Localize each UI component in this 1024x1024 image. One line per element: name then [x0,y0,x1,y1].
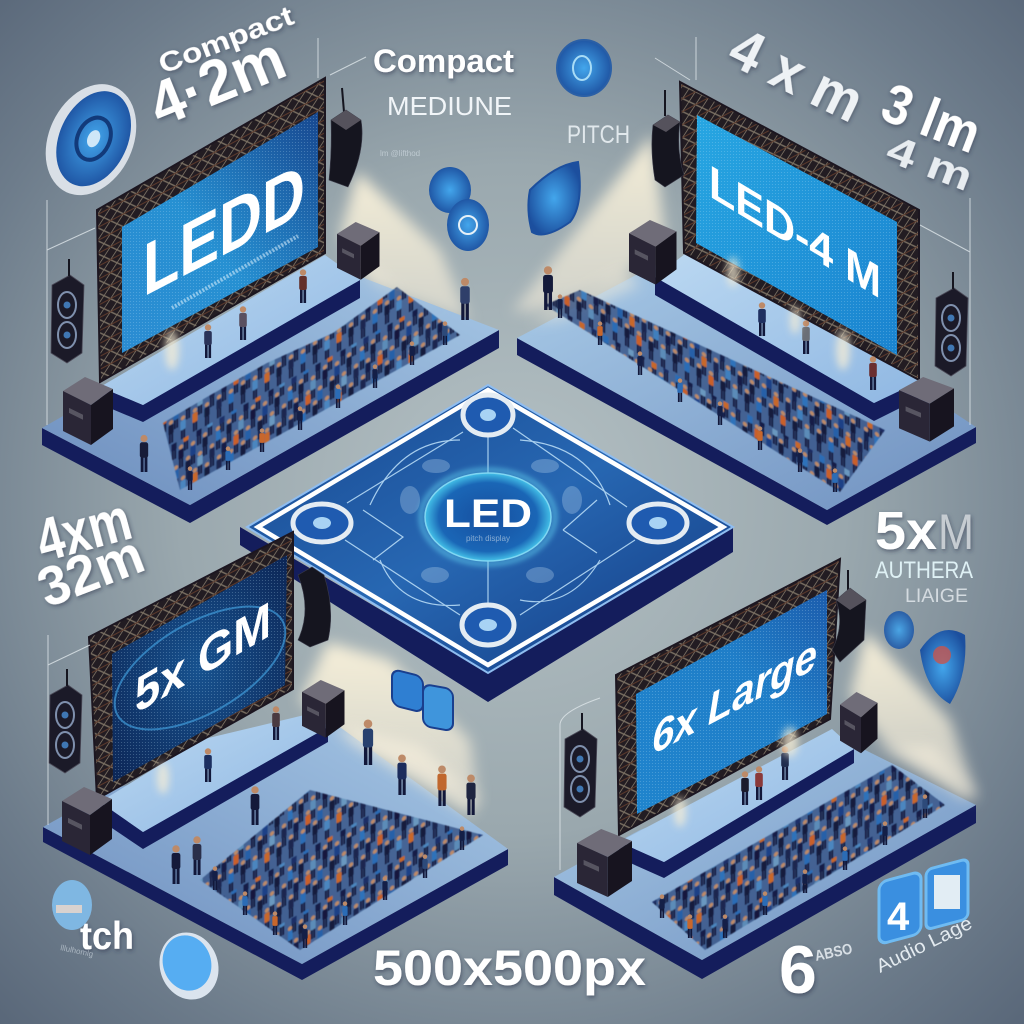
small caption: medium: lm @lifthod [380,149,420,158]
stage top right [655,247,922,421]
stage bottom left [100,712,328,849]
tower speaker bottom left [49,669,82,773]
label: 500x500px: 500x500px [373,940,646,996]
small caption: tch: lllulhomlg [60,943,94,959]
stage presenters bottom left [204,706,280,782]
spotlight top left [165,330,179,370]
spotlight bottom left [157,762,169,794]
crowd bottom left [200,790,483,950]
hanging speaker bottom left [298,567,331,647]
white border [258,390,723,665]
label: Authera: AUTHERA [875,557,973,584]
central LED badge: pitch display [466,534,510,543]
LED screen bottom left: 5x GM [135,591,271,725]
icon: thumbprint top [557,40,611,96]
label: 3 lm: 3 lm [874,70,990,165]
panel: large screen bottom right [554,559,976,979]
equipment bottom right [577,692,878,897]
beam overlay bottom right [880,745,975,800]
label: Compact flat: Compact [373,43,514,79]
label: 4 x m: 4 x m [719,15,874,135]
crowd top right [545,290,885,492]
icon: shield top right [528,162,580,234]
label: PITCH: PITCH [567,121,630,149]
stage top left [100,255,360,422]
dimension lines bottom left [48,635,90,825]
label: 5xM: M [938,504,974,560]
panel: screen bottom left [43,532,508,980]
LED screen top left: LEDD [143,146,305,313]
crowd top left [163,287,460,490]
panel: compact screen top left [42,38,499,523]
icons: medium badges [429,167,489,251]
diagram top surface [247,385,733,673]
tower speaker bottom right [564,713,597,817]
platform bottom left [43,725,508,980]
icon: mascot face bottom left [52,880,92,930]
platform top left [42,265,499,523]
standing person front left [140,435,148,472]
tower speaker top left [51,259,84,363]
icons: bottom right upper [884,611,965,704]
label: 4xm: 4xm [29,485,138,575]
beam overlay top right [530,270,640,322]
node bottom [462,605,514,645]
node right [629,504,687,542]
icons: bottom right lower: 4 [887,895,910,939]
LED screen top right: LED-4 M [709,155,881,309]
equipment top left [63,222,380,445]
spotlights bottom right [674,727,798,827]
small caption: next to 6: ABSO [813,940,854,965]
stage presenters top left [204,269,307,358]
label: Medium: MEDIUNE [387,91,512,121]
label: 32m: 32m [29,523,152,619]
panel: centre LED diagram [240,385,733,702]
LED screen top left [97,78,325,382]
label: Audio Large: Audio Lage [873,913,976,977]
tower speaker top right [935,272,968,376]
standing person top right [543,266,553,310]
panel: medium screen top right [517,37,976,525]
stage bottom right [619,729,854,878]
equipment top right [629,220,954,442]
label: Large: LIAIGE [905,586,968,607]
spotlights top right [727,257,850,370]
label: 4·2m: 4·2m [139,24,295,140]
icons: bottom right lower [879,859,968,944]
diagram base [240,527,733,702]
icon: bottom left double badge [392,669,453,731]
standing people bottom left [172,720,476,884]
label: 6: 6 [779,932,817,1008]
platform top right [517,265,976,525]
LED screen bottom right: 6x Large [652,627,817,764]
stage presenters top right [758,302,877,390]
beam overlay bottom left [335,725,480,815]
LED screen top right [680,82,919,380]
icon: disc top left [28,69,154,210]
dimension lines top right [655,37,970,425]
light beams [300,135,978,800]
hanging speaker top right [652,90,684,187]
node left [293,504,351,542]
label: 5xM: 5x [875,501,937,561]
dimension lines bottom right [560,698,600,870]
hanging speaker top left [329,88,362,187]
hanging speaker bottom right [832,570,866,662]
crowd bottom right [652,765,945,950]
stage presenters bottom right [741,746,789,805]
equipment bottom left [62,680,344,855]
dimension lines top left [47,38,366,425]
central LED badge [421,470,555,564]
beam overlay top left [345,240,465,320]
central LED badge: LED [444,492,532,536]
LED screen bottom right [616,559,840,835]
node top [463,395,513,435]
label: 4 m: 4 m [881,127,979,200]
label: 5xM [875,501,974,561]
LED screen bottom left [89,532,305,799]
sketch details on diagram [400,459,582,583]
platform bottom right [554,745,976,979]
standing person top left [460,278,470,320]
label: tch: tch [80,915,134,958]
icon: pill bottom left [151,925,227,1007]
label: Compact rotated: Compact [154,0,298,80]
connector lines [345,428,635,615]
